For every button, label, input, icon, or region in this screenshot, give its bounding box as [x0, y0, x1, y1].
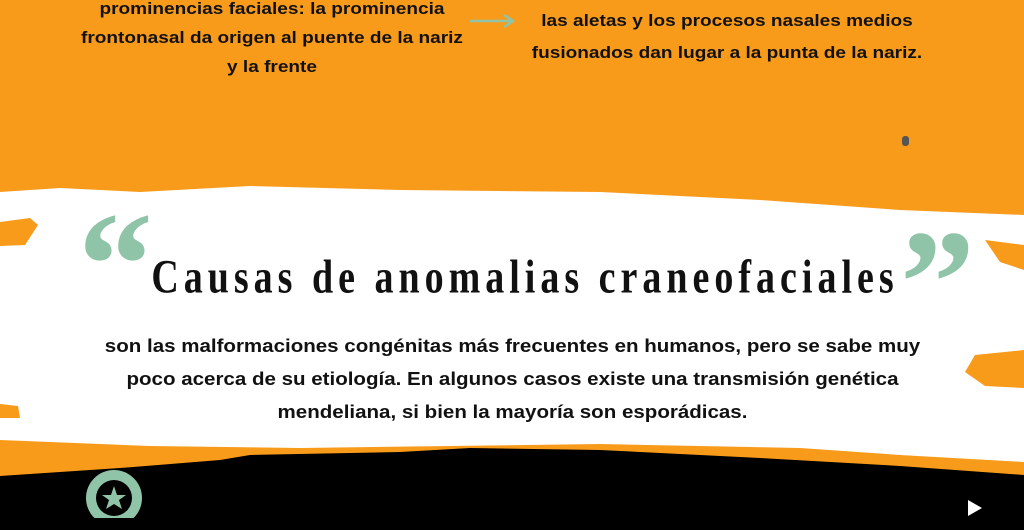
- text block left top: [81, 0, 463, 76]
- heading: Causas de anomalias craneofaciales: [151, 251, 899, 304]
- text block right top: las aletas y los procesos nasales medios: [541, 11, 913, 30]
- quote open: “: [78, 182, 153, 348]
- text block left top: y la frente: [227, 57, 317, 76]
- icon: corner arrow: [968, 500, 982, 516]
- black bottom: [0, 448, 1024, 530]
- text block right top: [532, 11, 922, 62]
- body text: mendeliana, si bien la mayoría son esporádicas.: [278, 402, 747, 422]
- body text: son las malformaciones congénitas más frecuentes en humanos, pero se sabe muy: [105, 336, 920, 356]
- icon: small pin: [902, 136, 909, 146]
- arrow: [470, 14, 516, 28]
- body text: poco acerca de su etiología. En algunos casos existe una transmisión genética: [126, 369, 899, 389]
- icon: badge star: [86, 470, 142, 518]
- text block right top: fusionados dan lugar a la punta de la nariz.: [532, 43, 922, 62]
- quote close: ”: [900, 200, 975, 366]
- white torn band: [0, 186, 1024, 462]
- text block left top: frontonasal da origen al puente de la nariz: [81, 28, 463, 47]
- body text: [105, 336, 920, 422]
